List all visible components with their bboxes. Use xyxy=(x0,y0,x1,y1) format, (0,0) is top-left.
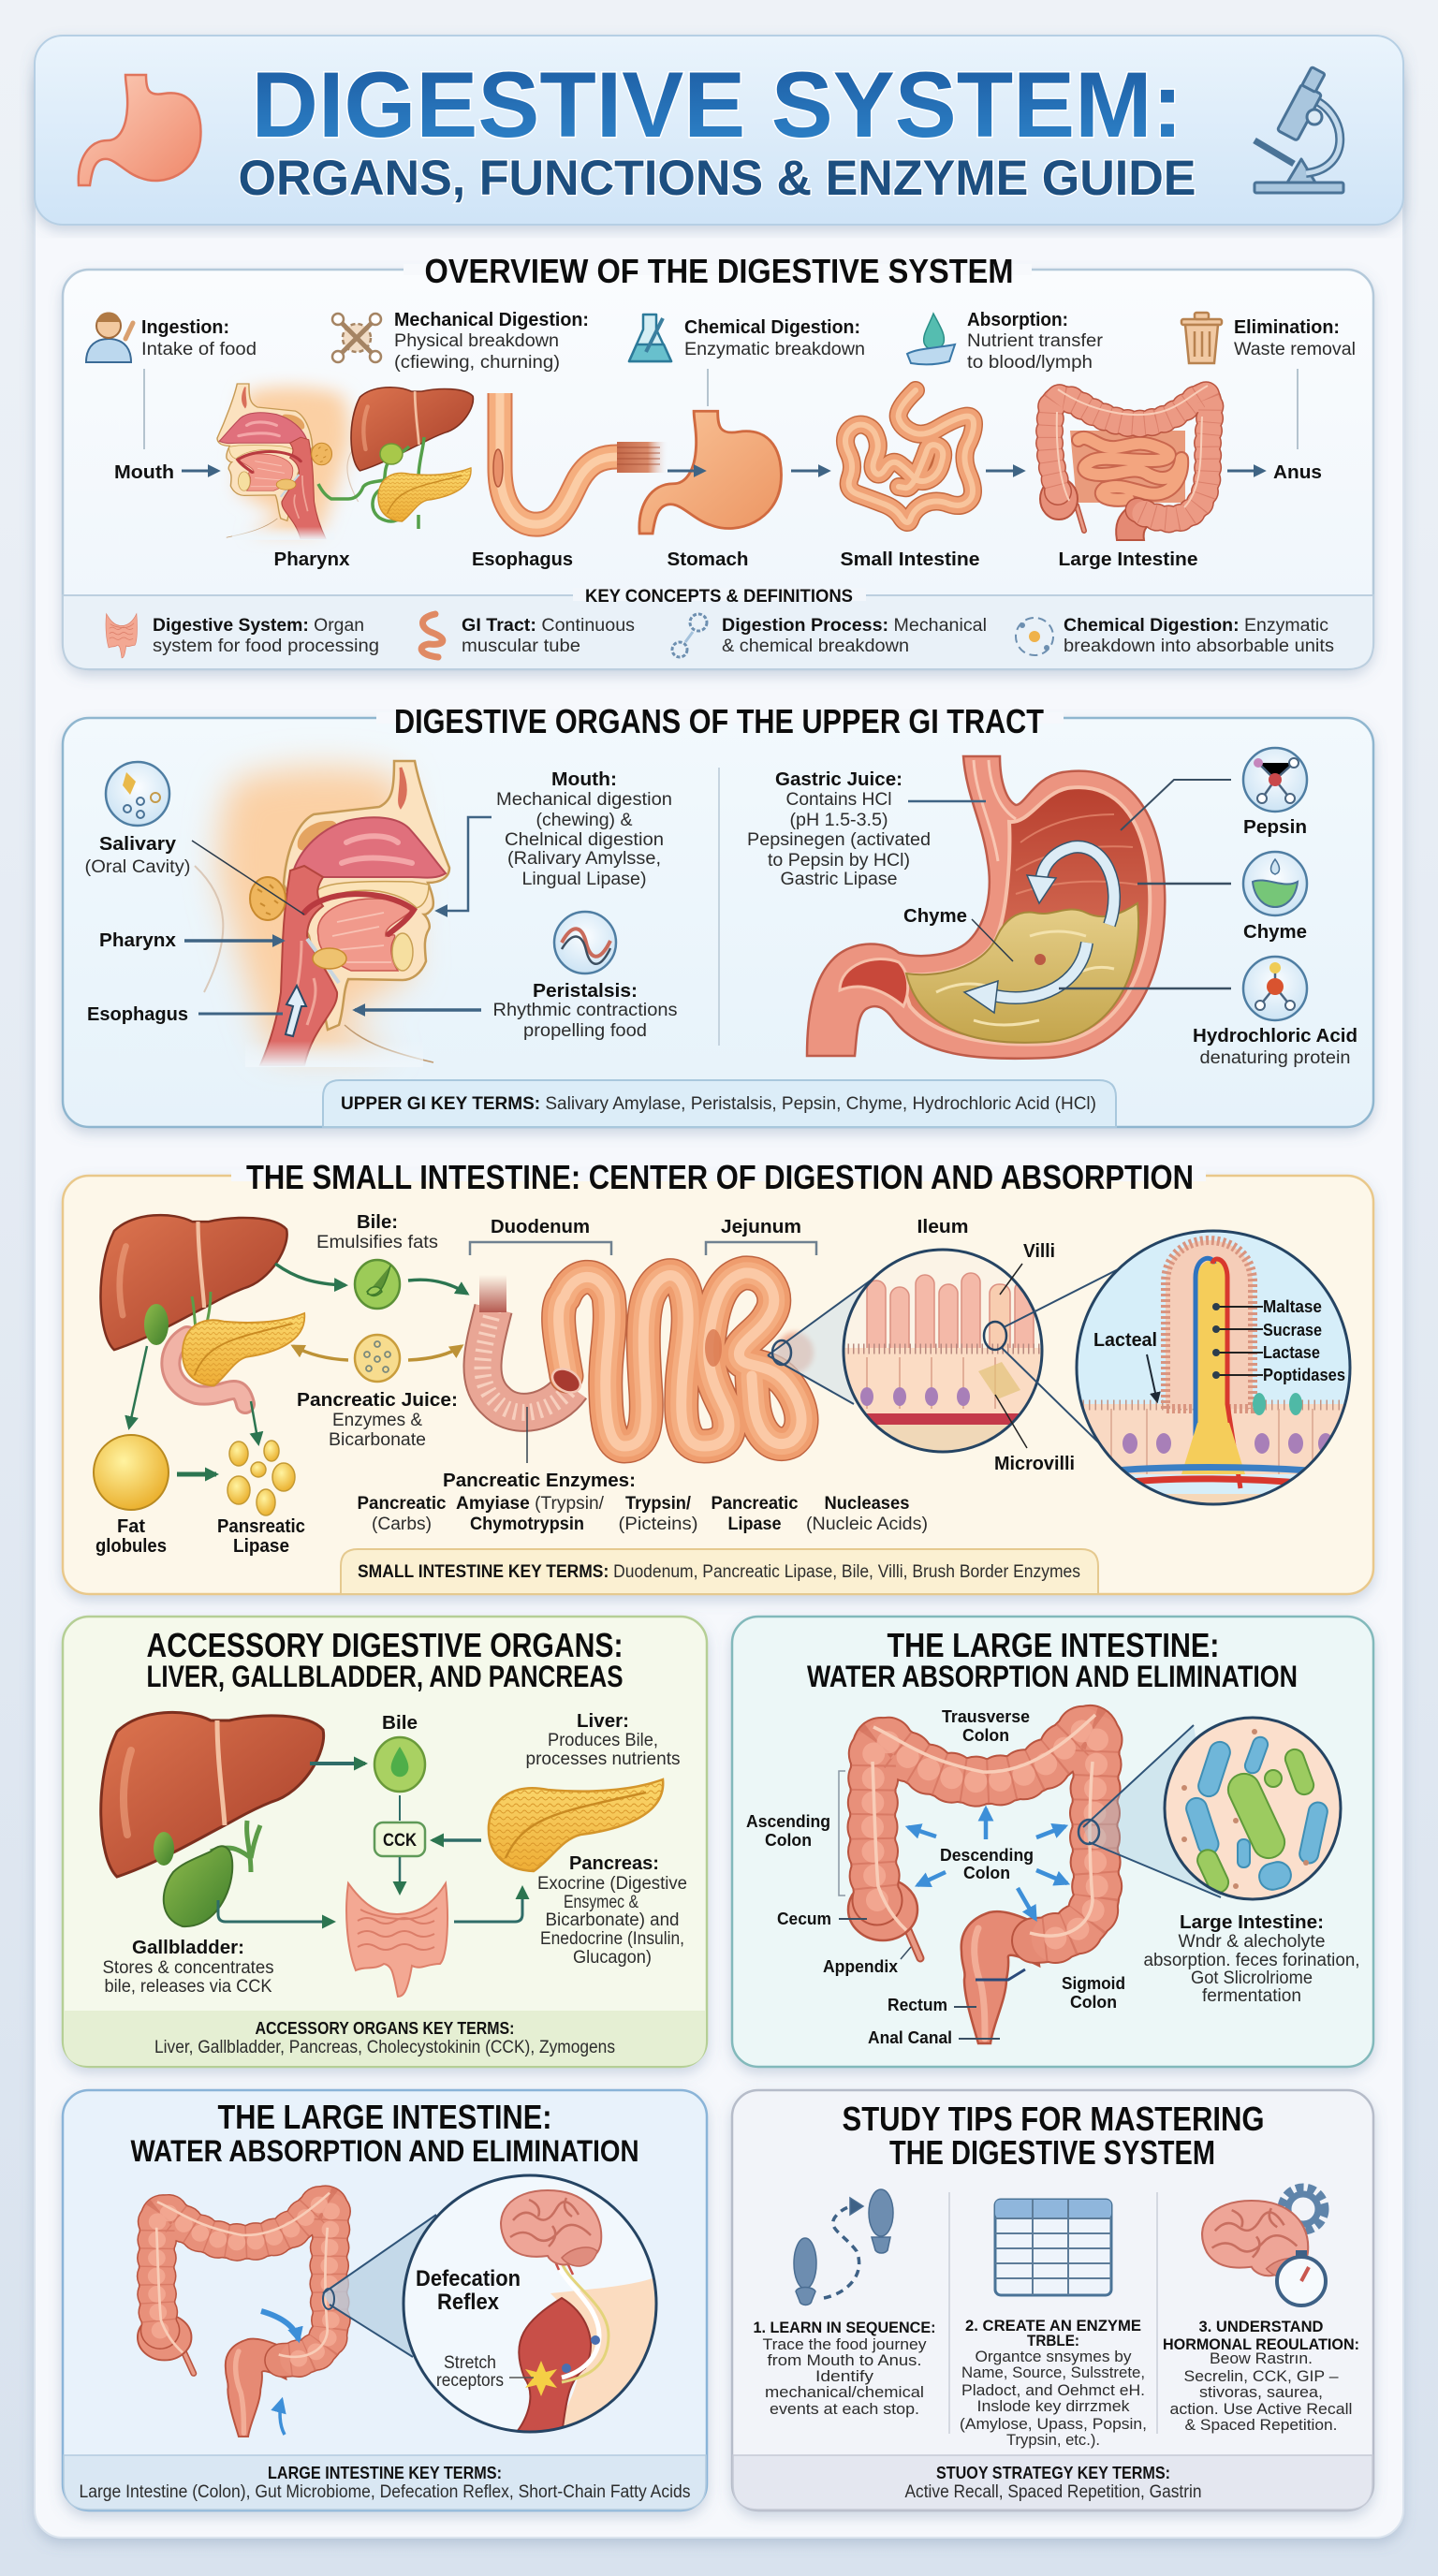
text: pancreatic enzymes: Lipase xyxy=(728,1515,781,1534)
text: mechanical digestion: Mechanical Digestion: xyxy=(394,310,589,330)
text: bile: Emulsifies fats xyxy=(316,1233,438,1252)
labels: colon parts: Ascending xyxy=(746,1812,830,1831)
text: large intestine xyxy=(1144,1912,1359,2006)
labels: colon parts: Colon xyxy=(962,1726,1009,1745)
tip 3: 3. UNDERSTAND xyxy=(1198,2318,1324,2335)
text: pancreatic enzymes: Amyiase (Trypsin/ xyxy=(456,1494,605,1514)
organ: esophagus xyxy=(493,393,668,524)
text: gastric juice: Contains HCl xyxy=(786,790,891,810)
tip 1: Identify xyxy=(815,2367,874,2385)
text: mouth: Mouth: xyxy=(551,769,617,790)
panel: defecation xyxy=(63,2090,707,2510)
labels: brush border enzymes: Maltase xyxy=(1263,1297,1322,1316)
icon: gi tract xyxy=(421,614,443,657)
text: absorption: Absorption: xyxy=(967,310,1068,330)
text: mechanical digestion: (cfiewing, churning) xyxy=(394,353,560,373)
text: pancreatic juice xyxy=(297,1390,458,1450)
text: pancreas: Enedocrine (Insulin, xyxy=(540,1929,684,1949)
arrow: liver to bile xyxy=(310,1762,365,1765)
label: villi xyxy=(1000,1241,1055,1295)
key terms: small intestine xyxy=(341,1549,1098,1594)
text: elimination: Elimination: xyxy=(1234,317,1340,338)
definition: digestion process: Digestion Process: Mechanical xyxy=(722,616,987,636)
tip 2: Organtce snsymes by xyxy=(976,2348,1132,2365)
text: pancreatic enzymes: Trypsin/ xyxy=(625,1494,692,1514)
panel: overview xyxy=(63,252,1373,669)
label: bile: Bile xyxy=(382,1713,418,1734)
icon: pepsin xyxy=(1243,748,1307,812)
tip 1: mechanical/chemical xyxy=(765,2383,924,2401)
definition: digestive system: Digestive System: Organ xyxy=(153,616,364,636)
text: liver: Produces Bile, xyxy=(548,1731,658,1750)
labels: brush border enzymes: Lactase xyxy=(1263,1343,1320,1362)
heading: study tips: STUDY TIPS FOR MASTERING xyxy=(843,2100,1264,2138)
organ: pharynx xyxy=(217,384,363,540)
text: ingestion: Ingestion: xyxy=(141,317,229,338)
arrows: water absorption xyxy=(908,1808,1067,1980)
inset: gut microbiome xyxy=(1165,1718,1341,1900)
arrow: mouth callout xyxy=(437,817,492,911)
illustration: colon xyxy=(848,1715,1097,2043)
inset border: villi xyxy=(844,1250,1042,1452)
label: chyme in stomach xyxy=(903,906,1013,961)
labels: fat globules, lipase: Pansreatic xyxy=(217,1516,305,1537)
text: mouth: (Ralivary Amylsse, xyxy=(507,849,661,869)
inset cone xyxy=(323,2215,436,2357)
labels: colon parts: Colon xyxy=(963,1864,1010,1882)
arrow: emulsification xyxy=(177,1471,216,1477)
text: peristalsis xyxy=(492,981,678,1041)
inset cone xyxy=(1083,1725,1221,1897)
arrow: pancreas to CCK xyxy=(433,1838,481,1842)
icon: digestive system xyxy=(106,614,137,658)
labels: colon parts: Sigmoid xyxy=(1062,1974,1125,1993)
key terms: study strategy xyxy=(733,2455,1372,2510)
illustration: colon xyxy=(138,2193,331,2437)
text: mouth: Mechanical digestion xyxy=(496,790,672,810)
key terms: upper GI: UPPER GI KEY TERMS: Salivary Amylase, Peristalsis, Pepsin, Chyme, Hydrochloric Acid (HCl) xyxy=(341,1094,1096,1114)
text: pancreatic enzymes: Pancreatic Enzymes: xyxy=(443,1471,636,1491)
heading: upper GI: DIGESTIVE ORGANS OF THE UPPER GI TRACT xyxy=(394,702,1044,740)
text: mouth xyxy=(496,769,672,889)
heading: defecation panel: THE LARGE INTESTINE: xyxy=(217,2098,552,2136)
heading: key concepts: KEY CONCEPTS & DEFINITIONS xyxy=(585,587,853,607)
illustration: liver, gallbladder and pancreas xyxy=(100,1215,304,1404)
text: mouth: Chelnical digestion xyxy=(505,830,664,850)
icon: emulsified droplets xyxy=(227,1441,295,1515)
labels: fat globules, lipase: Fat xyxy=(117,1516,145,1537)
text: peristalsis: propelling food xyxy=(523,1021,647,1041)
organ labels: Esophagus xyxy=(472,549,573,570)
label: lacteal xyxy=(1093,1330,1157,1401)
labels: colon parts: Anal Canal xyxy=(868,2028,952,2047)
icon: fat globule xyxy=(94,1435,169,1510)
icon: bile droplet xyxy=(374,1737,425,1792)
key terms: large intestine: Large Intestine (Colon), Gut Microbiome, Defecation Reflex, Short-Chain Fatty Acids xyxy=(79,2482,691,2502)
heading: small intestine: THE SMALL INTESTINE: CENTER OF DIGESTION AND ABSORPTION xyxy=(246,1158,1194,1196)
arrow: bile to duodenum xyxy=(408,1280,467,1294)
arrow: mouth to pharynx xyxy=(182,470,218,472)
text: large intestine: absorption. feces forination, xyxy=(1144,1951,1359,1970)
labels: brush border enzymes: Poptidases xyxy=(1263,1366,1345,1384)
definition: gi tract: GI Tract: Continuous xyxy=(462,616,635,636)
label: hydrochloric acid: Hydrochloric Acid xyxy=(1193,1026,1357,1046)
labels: fat globules, lipase: globules xyxy=(95,1536,167,1557)
arrow: liver to fat globules xyxy=(129,1346,147,1427)
heading: accessory organs xyxy=(146,1626,624,1693)
heading: study tips xyxy=(843,2100,1264,2172)
labels: reflex xyxy=(416,2266,534,2391)
process stage icon: elimination xyxy=(1181,313,1222,363)
tip 2: Trypsin, etc.). xyxy=(1006,2431,1100,2449)
tip 1: from Mouth to Anus. xyxy=(768,2351,921,2369)
text: mechanical digestion xyxy=(394,310,589,373)
arrow: intestine to pancreas xyxy=(454,1888,522,1922)
text: gallbladder: Gallbladder: xyxy=(132,1938,244,1958)
text: large intestine: Large Intestine: xyxy=(1180,1912,1324,1933)
inset: defecation reflex xyxy=(404,2175,660,2434)
panel: large intestine xyxy=(732,1617,1373,2067)
text: pancreatic enzymes: Pancreatic xyxy=(358,1494,447,1514)
panel: accessory organs xyxy=(63,1617,707,2067)
labels: colon parts xyxy=(746,1707,1125,2047)
key terms: upper GI xyxy=(323,1080,1116,1127)
label: anus: Anus xyxy=(1273,462,1322,483)
text: pancreas: Bicarbonate) and xyxy=(545,1910,680,1930)
text: pancreatic juice: Pancreatic Juice: xyxy=(297,1390,458,1411)
process stage icon: chemical digestion xyxy=(629,315,671,361)
CCK box xyxy=(374,1822,425,1856)
label: mouth: Mouth xyxy=(114,462,174,483)
text: pancreatic enzymes: Nucleases xyxy=(824,1494,910,1514)
heading: large intestine: THE LARGE INTESTINE: xyxy=(888,1626,1219,1664)
panel: study tips xyxy=(732,2090,1373,2510)
label: hydrochloric acid xyxy=(1193,1026,1357,1068)
text: pancreas: Exocrine (Digestive xyxy=(537,1874,687,1894)
text: large intestine: Got Slicrolriome xyxy=(1191,1969,1313,1988)
heading: study tips: THE DIGESTIVE SYSTEM xyxy=(889,2133,1215,2172)
text: elimination xyxy=(1234,317,1356,359)
text: pancreas: Glucagon) xyxy=(573,1948,652,1968)
arrow: churning upper xyxy=(1041,847,1114,925)
tip 2 xyxy=(960,2317,1147,2449)
icon: microscope xyxy=(1255,67,1343,193)
arrow: pancreas to lipase xyxy=(251,1401,258,1443)
text: pancreatic enzymes: (Carbs) xyxy=(372,1515,432,1534)
text: gastric juice: Pepsinegen (activated xyxy=(747,830,931,850)
illustration: small intestine xyxy=(479,1273,814,1446)
text: large intestine: fermentation xyxy=(1202,1986,1301,2006)
text: gastric juice: Gastric Juice: xyxy=(775,769,902,790)
arrow: CCK to intestine xyxy=(399,1857,401,1893)
illustration: head sagittal section xyxy=(195,761,449,1067)
key terms: small intestine: SMALL INTESTINE KEY TERMS: Duodenum, Pancreatic Lipase, Bile, Villi, Brush Border Enzymes xyxy=(358,1562,1080,1582)
labels: colon parts: Descending xyxy=(940,1846,1034,1865)
text: pancreatic enzymes: (Picteins) xyxy=(618,1515,698,1534)
text: elimination: Waste removal xyxy=(1234,340,1356,359)
text: pancreatic enzymes: Pancreatic xyxy=(712,1494,799,1514)
tip 2: Pladoct, and Oehmct eH. xyxy=(961,2381,1145,2399)
tip 3: action. Use Active Recall xyxy=(1170,2400,1352,2418)
heading: accessory organs: LIVER, GALLBLADDER, AND PANCREAS xyxy=(146,1660,624,1693)
organ: stomach xyxy=(639,411,781,534)
arrow: juice to pancreas xyxy=(293,1346,348,1360)
heading: defecation panel: WATER ABSORPTION AND ELIMINATION xyxy=(131,2134,638,2168)
text: gallbladder xyxy=(103,1938,273,1997)
icon: chyme xyxy=(1243,852,1307,915)
title banner xyxy=(35,36,1403,225)
key concepts strip xyxy=(63,587,1373,669)
organ: small intestine xyxy=(845,390,974,522)
tip 2: Name, Source, Sulsstrete, xyxy=(961,2364,1145,2381)
key concepts strip: muscular tube xyxy=(462,637,580,656)
label: villi: Villi xyxy=(1023,1241,1055,1262)
inset border: single villus xyxy=(1077,1231,1350,1504)
labels: intestine segments: Ileum xyxy=(917,1217,968,1237)
labels: colon parts: Colon xyxy=(765,1831,812,1850)
illustration: intestine xyxy=(346,1883,448,1997)
label: salivary xyxy=(84,834,191,877)
tip 2: (Amylose, Upass, Popsin, xyxy=(960,2415,1147,2433)
label: chyme in stomach: Chyme xyxy=(903,906,967,927)
tip 3 xyxy=(1163,2318,1359,2434)
label: esophagus: Esophagus xyxy=(87,1004,188,1025)
inset: single villus xyxy=(1077,1231,1352,1507)
label: salivary: Salivary xyxy=(99,834,177,855)
text: pancreatic enzymes: (Nucleic Acids) xyxy=(806,1515,928,1534)
tip 1: Trace the food journey xyxy=(762,2335,927,2353)
text: peristalsis: Peristalsis: xyxy=(533,981,638,1002)
illustration: stomach cross-section xyxy=(807,756,1165,1059)
tip 3: stivoras, saurea, xyxy=(1199,2383,1323,2401)
text: peristalsis: Rhythmic contractions xyxy=(492,1001,678,1020)
tip 2: 2. CREATE AN ENZYME xyxy=(965,2317,1141,2334)
icon: pancreatic juice xyxy=(355,1335,400,1382)
label: pepsin: Pepsin xyxy=(1243,817,1307,838)
label: chyme: Chyme xyxy=(1243,922,1307,943)
text: gallbladder: Stores & concentrates xyxy=(103,1958,273,1978)
text: absorption xyxy=(967,310,1104,373)
labels: brush border enzymes: Sucrase xyxy=(1263,1321,1322,1339)
text: liver: Liver: xyxy=(577,1711,629,1732)
labels: colon parts: Appendix xyxy=(823,1957,898,1976)
tip 2: Inslode key dirrzmek xyxy=(977,2397,1130,2415)
icon: hydrochloric acid xyxy=(1243,957,1307,1020)
tip 3: Secrelin, CCK, GIP – xyxy=(1183,2367,1339,2385)
label: lacteal: Lacteal xyxy=(1093,1330,1157,1351)
key terms: study strategy: Active Recall, Spaced Repetition, Gastrin xyxy=(904,2482,1202,2502)
text: mouth: (chewing) & xyxy=(536,811,633,830)
organ labels: Large Intestine xyxy=(1058,549,1198,570)
process stage icon: ingestion xyxy=(86,313,133,362)
text: liver: processes nutrients xyxy=(526,1749,680,1769)
labels: brush border enzymes xyxy=(1212,1297,1345,1384)
icon: stomach xyxy=(79,75,200,185)
tip 1: 1. LEARN IN SEQUENCE: xyxy=(753,2319,936,2336)
text: pancreatic juice: Enzymes & xyxy=(332,1411,422,1430)
text: gallbladder: bile, releases via CCK xyxy=(105,1977,272,1997)
arrow: juice to duodenum xyxy=(408,1346,462,1360)
text: pancreas: Pancreas: xyxy=(569,1853,659,1874)
title line 1: DIGESTIVE SYSTEM: xyxy=(251,52,1183,156)
process stage icon: mechanical digestion xyxy=(332,314,381,362)
label: salivary: (Oral Cavity) xyxy=(84,857,191,877)
key terms: accessory organs: Liver, Gallbladder, Pancreas, Cholecystokinin (CCK), Zymogens xyxy=(154,2038,615,2057)
icon: chemical digestion xyxy=(1016,618,1053,655)
text: pancreas: Ensymec & xyxy=(564,1893,638,1912)
tip 1: events at each stop. xyxy=(770,2400,919,2418)
icon: enzyme table xyxy=(995,2200,1111,2295)
arrow: esophagus to stomach xyxy=(668,470,704,472)
icon: brain, gear, stopwatch xyxy=(1202,2188,1326,2305)
illustration: liver xyxy=(101,1712,324,1877)
definition: chemical digestion: Chemical Digestion: Enzymatic xyxy=(1064,616,1328,636)
text: liver xyxy=(526,1711,680,1769)
labels: intestine segments: Duodenum xyxy=(491,1217,590,1237)
text: gastric juice xyxy=(747,769,931,889)
labels: intestine segments: Jejunum xyxy=(721,1217,801,1237)
text: chemical digestion: Chemical Digestion: xyxy=(684,317,860,338)
label: hydrochloric acid: denaturing protein xyxy=(1200,1048,1350,1068)
arrow: esophagus flow xyxy=(286,986,306,1036)
text: mechanical digestion: Physical breakdown xyxy=(394,331,559,351)
tip 1 xyxy=(753,2319,936,2418)
text: bile: Bile: xyxy=(357,1212,398,1233)
text: gastric juice: (pH 1.5-3.5) xyxy=(790,811,888,830)
text: pancreatic enzymes: Chymotrypsin xyxy=(470,1515,584,1534)
heading: overview: OVERVIEW OF THE DIGESTIVE SYSTEM xyxy=(425,252,1013,290)
arrow: peristalsis callout xyxy=(355,1008,481,1012)
label: microvilli: Microvilli xyxy=(994,1454,1075,1474)
icon: salivary enzymes xyxy=(106,762,169,826)
tip 3: HORMONAL REOULATION: xyxy=(1163,2335,1359,2353)
key terms: accessory organs: ACCESSORY ORGANS KEY TERMS: xyxy=(255,2019,515,2038)
labels: reflex: Stretch xyxy=(444,2353,496,2373)
label: microvilli xyxy=(994,1395,1075,1474)
key concepts strip: & chemical breakdown xyxy=(722,637,909,656)
icon: digestion process xyxy=(672,614,707,657)
text: absorption: to blood/lymph xyxy=(967,353,1093,373)
arrow: large intestine to anus xyxy=(1227,470,1264,472)
organ labels xyxy=(273,549,1198,570)
key terms: study strategy: STUOY STRATEGY KEY TERMS: xyxy=(936,2464,1170,2482)
icon: peristalsis xyxy=(554,912,616,973)
organ labels: Pharynx xyxy=(273,549,350,570)
heading: defecation panel xyxy=(131,2098,638,2168)
text: ingestion xyxy=(141,317,257,359)
text: pancreatic enzymes xyxy=(358,1407,928,1534)
arrow: stomach to small intestine xyxy=(791,470,829,472)
arrow: small to large intestine xyxy=(986,470,1023,472)
inset: villi xyxy=(844,1272,1041,1451)
icon: footprints xyxy=(794,2189,893,2305)
labels: reflex: receptors xyxy=(436,2371,504,2391)
heading: accessory organs: ACCESSORY DIGESTIVE ORGANS: xyxy=(146,1626,624,1664)
text: large intestine: Wndr & alecholyte xyxy=(1178,1932,1326,1952)
text: gastric juice: Gastric Lipase xyxy=(781,870,897,889)
key terms: large intestine: LARGE INTESTINE KEY TERMS: xyxy=(268,2464,502,2482)
text: absorption: Nutrient transfer xyxy=(967,331,1104,351)
CCK box: CCK xyxy=(383,1831,417,1851)
labels: fat globules, lipase: Lipase xyxy=(233,1536,289,1557)
labels: colon parts: Rectum xyxy=(888,1996,947,2014)
text: pancreas xyxy=(537,1853,687,1968)
organ labels: Small Intestine xyxy=(841,549,979,570)
labels: colon parts: Cecum xyxy=(777,1910,831,1928)
text: bile xyxy=(316,1212,438,1252)
key terms: accessory organs xyxy=(64,2011,706,2066)
text: pancreatic juice: Bicarbonate xyxy=(329,1430,426,1450)
arrow: gallbladder to intestine xyxy=(218,1900,333,1922)
labels: reflex: Reflex xyxy=(437,2290,500,2315)
key concepts strip: breakdown into absorbable units xyxy=(1064,637,1334,656)
arrow: liver to bile xyxy=(275,1264,345,1285)
key terms: large intestine xyxy=(64,2455,706,2510)
label: pharynx: Pharynx xyxy=(99,930,176,951)
key concepts strip: system for food processing xyxy=(153,637,379,656)
heading: large intestine: WATER ABSORPTION AND ELIMINATION xyxy=(807,1660,1298,1693)
labels: fat globules, lipase xyxy=(95,1516,305,1557)
panel: upper GI tract xyxy=(63,702,1373,1127)
title line 2: ORGANS, FUNCTIONS & ENZYME GUIDE xyxy=(238,151,1196,206)
text: chemical digestion: Enzymatic breakdown xyxy=(684,340,865,359)
magnifier cone on intestine xyxy=(768,1280,872,1404)
tip 2: TRBLE: xyxy=(1027,2332,1079,2349)
organ: liver and pancreas xyxy=(318,388,473,529)
illustration: pancreas xyxy=(489,1779,663,1871)
text: chemical digestion xyxy=(684,317,865,359)
process stage icon: absorption xyxy=(907,314,955,364)
organ: large intestine xyxy=(1040,386,1210,540)
labels: colon parts: Colon xyxy=(1070,1993,1117,2012)
arrow: churning lower xyxy=(992,943,1087,998)
tip 3: Beow Rastrın. xyxy=(1210,2349,1313,2367)
text: mouth: Lingual Lipase) xyxy=(522,870,646,889)
illustration: gallbladder xyxy=(154,1821,260,1926)
text: gastric juice: to Pepsin by HCl) xyxy=(768,851,910,871)
tip 3: & Spaced Repetition. xyxy=(1185,2416,1337,2434)
organ labels: Stomach xyxy=(667,549,749,570)
arrows: movement xyxy=(261,2311,299,2435)
labels: colon parts: Trausverse xyxy=(942,1707,1030,1726)
heading: large intestine xyxy=(807,1626,1298,1693)
labels: intestine segments xyxy=(470,1217,968,1255)
labels: reflex: Defecation xyxy=(416,2266,521,2291)
icon: bile xyxy=(355,1260,400,1309)
panel: small intestine xyxy=(63,1158,1373,1594)
text: ingestion: Intake of food xyxy=(141,340,257,359)
